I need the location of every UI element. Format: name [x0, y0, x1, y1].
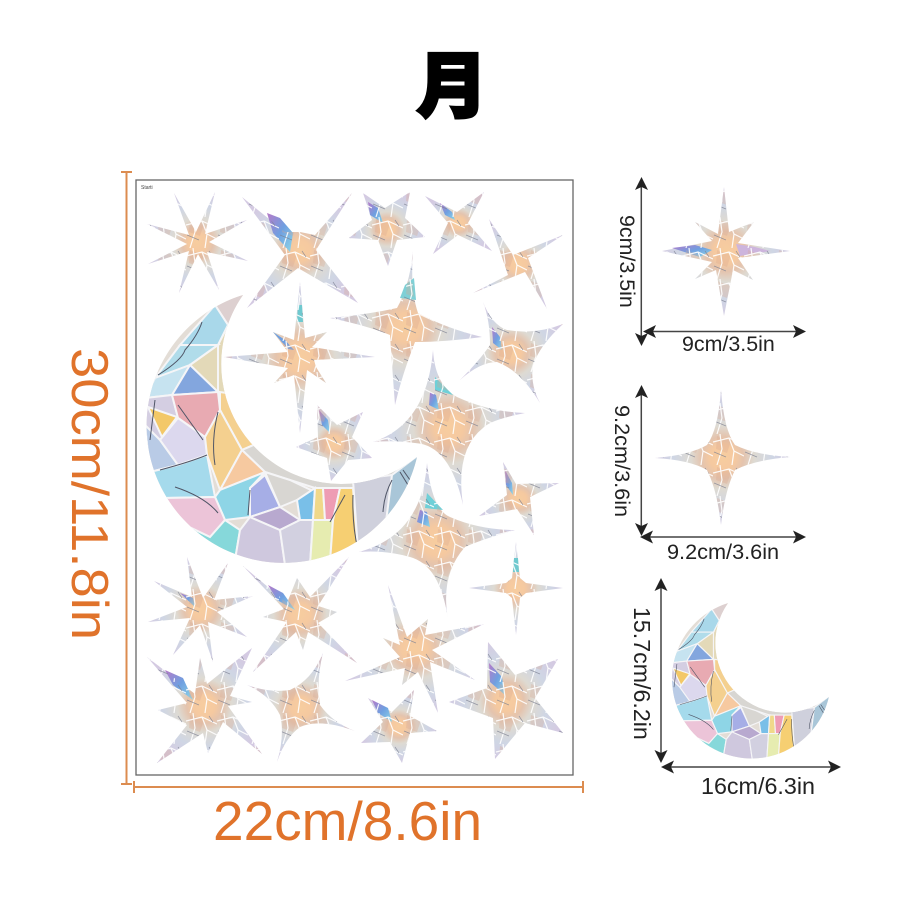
star 19 — [361, 690, 437, 763]
star 16 — [345, 585, 484, 713]
height label: 9cm/3.5in — [615, 215, 639, 308]
height label: 9.2cm/3.6in — [610, 405, 635, 517]
height arrow — [654, 578, 668, 763]
star 5 — [473, 219, 563, 309]
width arrow — [640, 530, 806, 544]
height arrow — [635, 177, 648, 346]
star 14 — [148, 557, 253, 662]
panel: sticker sheet — [136, 180, 573, 775]
star 20 — [449, 642, 563, 759]
star 3 — [349, 192, 425, 266]
height label: 15.7cm/6.2in — [629, 607, 655, 740]
panel: eight-point star size — [615, 177, 806, 356]
star 18 — [247, 653, 355, 762]
title: 月 — [416, 48, 488, 127]
width arrow — [643, 325, 806, 338]
sheet code label: Starti — [141, 185, 153, 191]
large crescent moon — [145, 288, 425, 565]
width label: 9.2cm/3.6in — [667, 539, 779, 564]
star 15 — [243, 557, 357, 672]
star 1 — [147, 192, 248, 293]
four-point star sticker — [655, 390, 790, 525]
panel: crescent moon size — [629, 578, 841, 799]
width label: 16cm/6.3in — [701, 773, 815, 799]
sheet width dimension line — [134, 781, 583, 793]
width arrow — [661, 760, 841, 774]
sheet frame — [136, 180, 573, 775]
star 13 — [469, 542, 563, 635]
sheet height dimension line — [121, 172, 132, 784]
star 9 — [330, 250, 482, 405]
panel: four-point star size — [610, 385, 806, 564]
star 2 — [242, 193, 358, 308]
height arrow — [635, 385, 648, 536]
sheet width label: 22cm/8.6in — [213, 790, 482, 852]
small crescent moon sticker — [671, 599, 834, 760]
star 12 — [359, 463, 515, 619]
star 10 — [373, 350, 525, 505]
sheet height label: 30cm/11.8in — [60, 348, 118, 640]
star 11 — [479, 462, 559, 535]
star 8 — [296, 405, 372, 481]
eight-point star sticker — [662, 187, 790, 316]
star 6 — [460, 302, 563, 403]
star 4 — [425, 192, 492, 254]
width label: 9cm/3.5in — [682, 332, 775, 356]
star 7 — [224, 282, 375, 433]
star 17 — [147, 648, 262, 763]
